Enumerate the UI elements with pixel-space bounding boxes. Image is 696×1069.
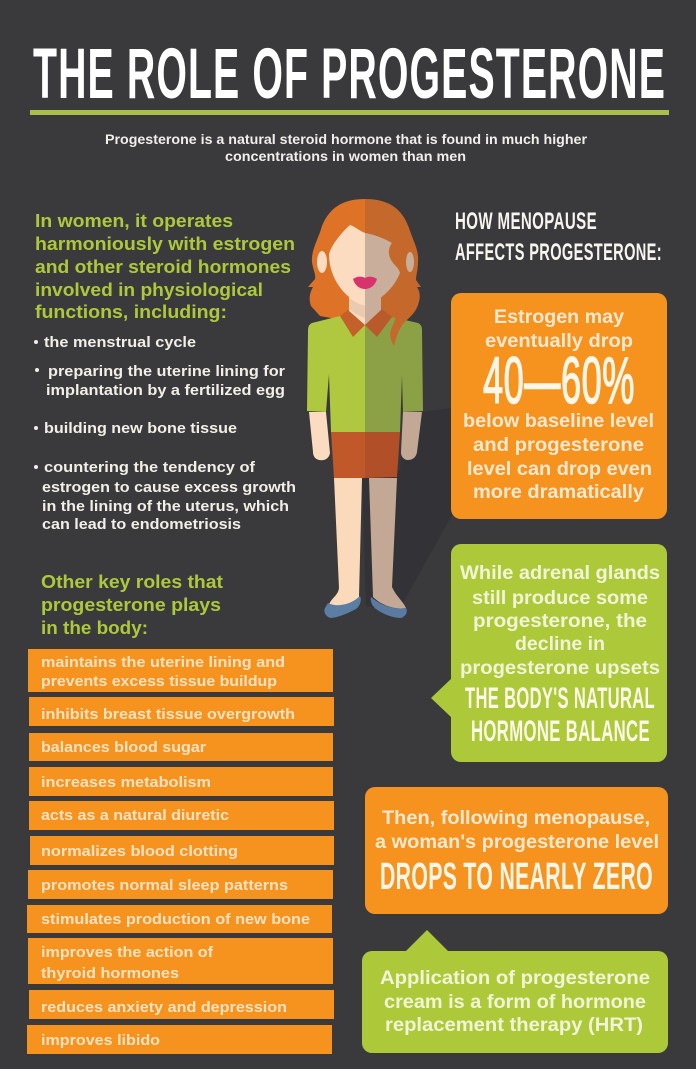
shoes: [324, 596, 361, 618]
role: blood clotting: normalizes blood clotting: [41, 843, 238, 860]
panel: following menopause: a woman's progesterone level: [375, 832, 659, 853]
role: breast tissue: inhibits breast tissue overgrowth: [41, 706, 295, 723]
role: anxiety: reduces anxiety and depression: [41, 999, 287, 1016]
bullet list: functions: countering the tendency of: [44, 459, 256, 476]
bullet list: functions: [34, 334, 296, 533]
role: uterine lining: [28, 649, 333, 692]
heading: other key roles: Other key roles that: [41, 572, 223, 592]
panel: following menopause: Then, following menopause,: [382, 808, 650, 829]
role: blood sugar: balances blood sugar: [41, 739, 206, 756]
panel: estrogen drop: eventually drop: [485, 331, 633, 352]
heading: other key roles: progesterone plays: [41, 595, 221, 615]
neck: [349, 290, 381, 326]
heading: other key roles: in the body:: [41, 618, 148, 638]
panel: estrogen drop: and progesterone: [473, 435, 644, 456]
bullet list: functions: can lead to endometriosis: [42, 516, 241, 533]
panel: estrogen drop: Estrogen may: [494, 307, 624, 328]
bullet list: functions: building new bone tissue: [44, 420, 237, 437]
panel: adrenal glands: While adrenal glands: [460, 563, 660, 584]
figure shadow: [362, 408, 452, 612]
skirt: [331, 432, 365, 478]
role: uterine lining: maintains the uterine lining and: [41, 654, 285, 671]
role: blood sugar: [29, 733, 333, 761]
heading: in women: In women, it operates: [35, 211, 233, 231]
panel: adrenal glands: progesterone, the: [473, 611, 647, 632]
role: thyroid: [28, 938, 333, 984]
bullet list: functions: in the lining of the uterus, which: [42, 498, 289, 515]
intro text: Progesterone is a natural steroid hormone that is found in much higher: [105, 132, 588, 147]
lips: [353, 277, 377, 289]
role: sleep: [28, 870, 333, 899]
role: thyroid: improves the action of: [41, 944, 214, 961]
hair curl: [390, 305, 418, 346]
heading: how menopause: [455, 208, 662, 266]
role: libido: improves libido: [41, 1032, 160, 1049]
role: blood clotting: [30, 836, 334, 865]
heading: in women: [35, 211, 295, 322]
panel: hormone replacement therapy: [362, 930, 668, 1053]
heading: in women: harmoniously with estrogen: [35, 234, 295, 254]
role: anxiety: [29, 990, 334, 1019]
heading: how menopause: HOW MENOPAUSE: [455, 208, 597, 235]
collar: [340, 310, 365, 337]
panel: hormone replacement therapy: cream is a form of hormone: [384, 992, 646, 1013]
panel: estrogen drop: below baseline level: [463, 411, 654, 432]
role: libido: [27, 1025, 332, 1054]
heading: other key roles: [41, 572, 223, 638]
heading: in women: involved in physiological: [35, 280, 263, 300]
role: new bone: stimulates production of new bone: [41, 911, 310, 928]
panel: adrenal glands: decline in: [515, 634, 605, 655]
panel: adrenal glands: [431, 544, 667, 762]
panel: following menopause: [365, 787, 668, 914]
bullet list: functions: the menstrual cycle: [44, 334, 196, 351]
shirt: [307, 316, 365, 432]
list: key roles: [27, 649, 334, 1054]
panel: estrogen drop: [451, 293, 667, 519]
role: thyroid: thyroid hormones: [41, 965, 179, 982]
panel: estrogen drop: more dramatically: [473, 482, 644, 503]
role: diuretic: [29, 801, 334, 830]
heading: in women: functions, including:: [35, 302, 227, 322]
intro text: [105, 132, 588, 164]
role: sleep: promotes normal sleep patterns: [41, 877, 288, 894]
ears: [317, 251, 327, 273]
intro text: concentrations in women than men: [225, 149, 466, 164]
role: metabolism: increases metabolism: [41, 774, 211, 791]
arms: [309, 412, 330, 460]
role: breast tissue: [29, 697, 334, 726]
panel: hormone replacement therapy: replacement therapy (HRT): [385, 1015, 643, 1036]
panel: adrenal glands: still produce some: [472, 588, 648, 609]
panel: estrogen drop: level can drop even: [467, 459, 652, 480]
hair: [308, 199, 421, 324]
panel: hormone replacement therapy: Application of progesterone: [380, 968, 650, 989]
woman figure: [307, 199, 423, 618]
panel: adrenal glands: progesterone upsets: [460, 658, 660, 679]
role: new bone: [27, 905, 332, 933]
role: metabolism: [29, 767, 333, 796]
heading: in women: and other steroid hormones: [35, 257, 291, 277]
bullet list: functions: preparing the uterine lining for: [48, 363, 285, 380]
bullet list: functions: estrogen to cause excess growth: [42, 479, 296, 496]
role: diuretic: acts as a natural diuretic: [41, 807, 229, 824]
role: uterine lining: prevents excess tissue buildup: [41, 673, 277, 690]
bullet list: functions: implantation by a fertilized egg: [46, 382, 285, 399]
face: [329, 225, 365, 305]
legs: [329, 478, 362, 606]
